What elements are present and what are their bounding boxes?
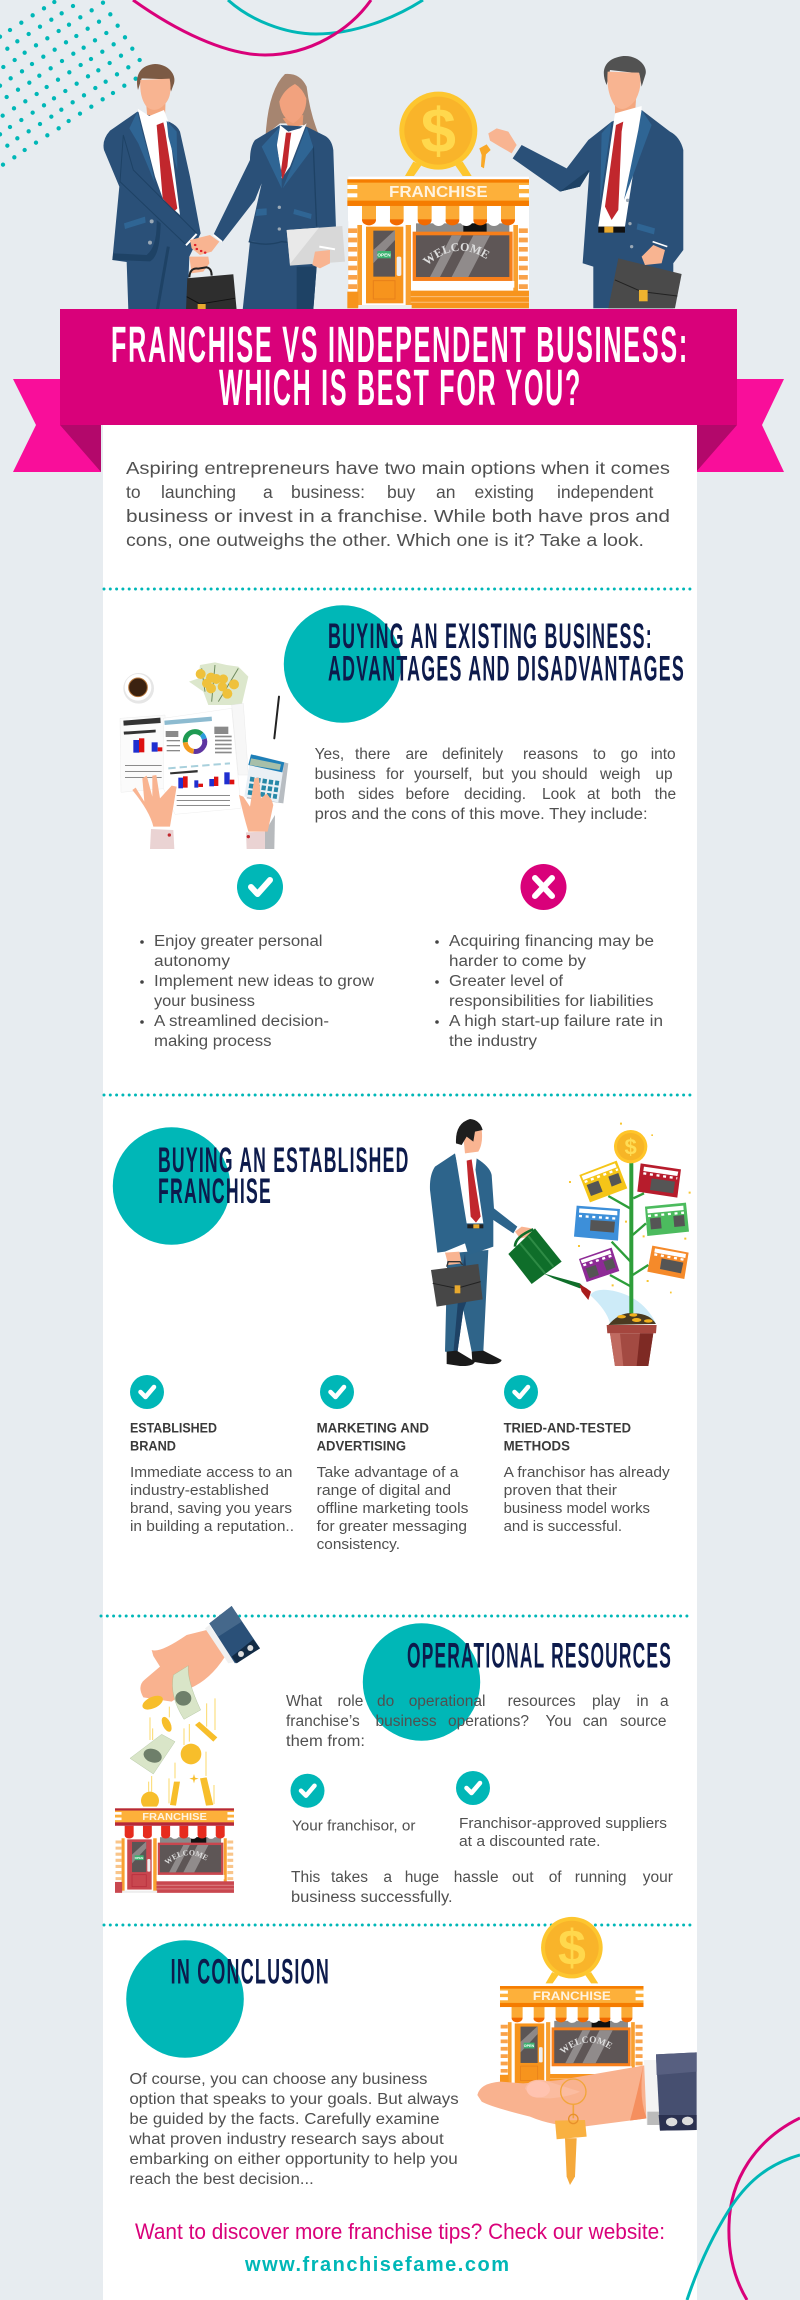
- teal circle: [363, 1623, 480, 1741]
- call to action text: www.franchisefame.com: [244, 2254, 509, 2276]
- section 4 paragraph: option that speaks to your goals. But always: [129, 2091, 459, 2108]
- feature text: range of digital and: [317, 1483, 451, 1499]
- feature: marketing and advertising: [317, 1375, 468, 1553]
- intro paragraph: [126, 458, 670, 550]
- section 3 paragraph: them from:: [286, 1733, 365, 1750]
- icon: teal check pros: [237, 864, 283, 910]
- list: pros: Enjoy greater personal: [154, 933, 322, 950]
- section 4 paragraph: [128, 2071, 459, 2188]
- feature text: in building a reputation..: [130, 1519, 294, 1535]
- section 3 paragraph: do: [377, 1693, 394, 1710]
- feature: tried and tested methods: [504, 1375, 670, 1535]
- illustration: man shaking hands with briefcase: [103, 64, 237, 310]
- section 1 paragraph: into: [651, 746, 676, 763]
- teal circle: [284, 605, 401, 723]
- feature text: brand, saving you years: [130, 1501, 292, 1517]
- section 3 heading with circle: [363, 1623, 672, 1741]
- section 4 paragraph: be guided by the facts. Carefully examine: [129, 2111, 440, 2128]
- section 1 paragraph: business: [315, 766, 376, 783]
- red franchise shop: [115, 1806, 234, 1893]
- feature text: [504, 1465, 670, 1535]
- icon: check: [456, 1771, 490, 1805]
- section 2 heading with circle: [113, 1127, 410, 1245]
- section 3 closing text: out: [512, 1869, 534, 1886]
- section 3 paragraph: You: [546, 1713, 572, 1730]
- section 3 closing text: [291, 1869, 673, 1906]
- teal circle: [126, 1940, 244, 2058]
- section 1 paragraph: for: [386, 766, 404, 783]
- illustration: woman in suit with folder: [213, 74, 345, 310]
- feature heading: TRIED-AND-TESTED: [504, 1420, 631, 1436]
- intro paragraph: launching: [161, 482, 236, 502]
- intro paragraph: a: [263, 482, 273, 502]
- illustration: hand holding shop, coin and key: [477, 1916, 697, 2185]
- list: pros: Implement new ideas to grow: [154, 973, 375, 990]
- illustration: man watering franchise money tree: [430, 1119, 691, 1366]
- title ribbon: [13, 309, 784, 472]
- section 1 paragraph: to: [593, 746, 606, 763]
- feature text: [130, 1465, 294, 1535]
- option text: at a discounted rate.: [459, 1834, 600, 1850]
- icon: check: [504, 1375, 538, 1409]
- heading text: BUYING AN ESTABLISHED: [158, 1141, 410, 1180]
- illustration: franchise shop with gold coin: WELCOME: [422, 243, 490, 264]
- section 1 paragraph: before: [406, 786, 449, 803]
- decorative curves bottom right: [687, 2118, 800, 2300]
- illustration: man holding out key with briefcase: [479, 56, 683, 308]
- section 3 paragraph: can: [583, 1713, 608, 1730]
- intro paragraph: independent: [557, 482, 653, 502]
- section 3 paragraph: franchise’s: [286, 1713, 360, 1730]
- section 3 paragraph: [286, 1693, 669, 1750]
- hand and sleeve: [140, 1606, 260, 1702]
- red franchise shop: WELCOME: [164, 1850, 208, 1864]
- feature heading: ADVERTISING: [317, 1438, 406, 1454]
- section 3 paragraph: operations?: [448, 1713, 529, 1730]
- icon: check: [320, 1375, 354, 1409]
- flower pot: [607, 1313, 657, 1366]
- call to action text: [135, 2219, 665, 2276]
- dotted dividers: [101, 589, 696, 1925]
- section 1 paragraph: there: [355, 746, 390, 763]
- section 3 paragraph: resources: [508, 1693, 576, 1710]
- section 3 paragraph: business: [376, 1713, 437, 1730]
- decorative curves top: [133, 0, 423, 55]
- section 1 paragraph: both: [315, 786, 345, 803]
- section 1 paragraph: weigh: [599, 766, 640, 783]
- section 3 closing text: hassle: [454, 1869, 499, 1886]
- section 1 paragraph: are: [406, 746, 428, 763]
- red franchise shop: OPEN: [135, 1856, 143, 1860]
- falling money: [130, 1666, 217, 1810]
- list: cons: A high start-up failure rate in: [449, 1013, 663, 1030]
- section 1 paragraph: deciding.: [464, 786, 526, 803]
- section 3 closing text: business successfully.: [291, 1889, 453, 1906]
- teal circle: [113, 1127, 230, 1245]
- source option: approved suppliers: [456, 1771, 667, 1850]
- heading text: [158, 1141, 410, 1211]
- feature heading: BRAND: [130, 1438, 176, 1454]
- section 3 paragraph: operational: [409, 1693, 485, 1710]
- list: cons: the industry: [449, 1033, 537, 1050]
- section 3 paragraph: in: [636, 1693, 649, 1710]
- section 4 paragraph: what proven industry research says about: [128, 2131, 444, 2148]
- icon: check: [290, 1774, 324, 1808]
- list: cons: Greater level of: [449, 973, 564, 990]
- feature heading: [130, 1420, 217, 1454]
- intro paragraph: business:: [291, 482, 365, 502]
- intro paragraph: buy: [387, 482, 415, 502]
- feature text: for greater messaging: [317, 1519, 467, 1535]
- feature text: Take advantage of a: [317, 1465, 460, 1481]
- section 1 paragraph: [315, 746, 676, 823]
- section 1 paragraph: you: [512, 766, 536, 783]
- option text: Your franchisor, or: [292, 1819, 416, 1835]
- list: pros: A streamlined decision-: [154, 1013, 329, 1030]
- intro paragraph: existing: [474, 482, 534, 502]
- illustration: franchise shop with gold coin: FRANCHISE: [389, 184, 488, 201]
- section 3 closing text: a: [383, 1869, 392, 1886]
- section 1 paragraph: definitely: [442, 746, 503, 763]
- section 1 paragraph: up: [655, 766, 673, 783]
- heading text: FRANCHISE: [158, 1172, 272, 1211]
- section 1 paragraph: Look: [542, 786, 576, 803]
- watering can: [508, 1228, 656, 1323]
- section 3 closing text: of: [549, 1869, 562, 1886]
- section 3 paragraph: role: [338, 1693, 363, 1710]
- feature text: offline marketing tools: [317, 1501, 468, 1517]
- section 1 paragraph: pros and the cons of this move. They include:: [315, 806, 648, 823]
- list: cons: harder to come by: [449, 953, 586, 970]
- ribbon tails: [13, 379, 784, 472]
- money plant: $: [625, 1135, 637, 1160]
- section 3 closing text: This: [291, 1869, 321, 1886]
- section 1 paragraph: go: [621, 746, 638, 763]
- section 3 closing text: huge: [405, 1869, 439, 1886]
- feature text: proven that their: [504, 1483, 617, 1499]
- intro paragraph: to: [126, 482, 141, 502]
- section 4 paragraph: Of course, you can choose any business: [129, 2071, 428, 2088]
- intro paragraph: an: [436, 482, 455, 502]
- feature heading: MARKETING AND: [317, 1420, 429, 1436]
- feature heading: [504, 1420, 631, 1454]
- list: cons: Acquiring financing may be: [449, 933, 654, 950]
- icon: pink cross cons: [520, 864, 566, 910]
- icon: check: [130, 1375, 164, 1409]
- section 1 paragraph: yourself,: [414, 766, 473, 783]
- ribbon banner: [60, 309, 737, 425]
- feature text: business model works: [504, 1501, 650, 1517]
- feature: established brand: [130, 1375, 294, 1535]
- heading text: IN CONCLUSION: [171, 1952, 330, 1992]
- feature text: A franchisor has already: [504, 1465, 670, 1481]
- section 4 heading with circle: [126, 1940, 330, 2058]
- section 1 paragraph: sides: [358, 786, 394, 803]
- list: cons: responsibilities for liabilities: [449, 993, 654, 1010]
- section 1 paragraph: should: [542, 766, 588, 783]
- section 1 paragraph: reasons: [523, 746, 578, 763]
- list: pros: making process: [154, 1033, 272, 1050]
- section 3 paragraph: What: [286, 1693, 323, 1710]
- section 1 paragraph: at: [587, 786, 601, 803]
- list: pros: [140, 933, 375, 1050]
- shop with coin: $: [558, 1920, 586, 1976]
- list: pros: autonomy: [154, 953, 230, 970]
- section 3 closing text: running: [575, 1869, 627, 1886]
- intro paragraph: business or invest in a franchise. While both have pros and: [126, 506, 670, 526]
- illustration: franchise shop with gold coin: [347, 92, 529, 308]
- illustration: franchise shop with gold coin: $: [421, 97, 456, 167]
- source option: your franchisor: [290, 1774, 416, 1835]
- feature text: Immediate access to an: [130, 1465, 292, 1481]
- list: cons: [435, 933, 663, 1050]
- section 3 closing text: your: [643, 1869, 673, 1886]
- red franchise shop: FRANCHISE: [142, 1812, 207, 1823]
- heading text: [328, 617, 685, 688]
- section 3 closing text: takes: [331, 1869, 368, 1886]
- feature heading: [317, 1420, 429, 1454]
- feature text: industry-established: [130, 1483, 269, 1499]
- section 3 paragraph: a: [660, 1693, 669, 1710]
- man: [430, 1119, 532, 1366]
- decorative dot pattern top left: [0, 2, 140, 165]
- illustration: desk with reports, hands, calculator: [120, 662, 288, 849]
- feature text: consistency.: [317, 1537, 400, 1553]
- feature text: and is successful.: [504, 1519, 622, 1535]
- intro paragraph: cons, one outweighs the other. Which one is it? Take a look.: [126, 530, 644, 550]
- section 1 heading with circle: [284, 605, 685, 723]
- intro paragraph: Aspiring entrepreneurs have two main options when it comes: [126, 458, 670, 478]
- shop with coin: OPEN: [524, 2044, 535, 2048]
- feature text: [317, 1465, 468, 1553]
- section 4 paragraph: embarking on either opportunity to help you: [129, 2151, 458, 2168]
- section 4 paragraph: reach the best decision...: [129, 2171, 314, 2188]
- title text: [111, 316, 689, 416]
- shop with coin: WELCOME: [559, 2036, 612, 2053]
- section 3 paragraph: source: [620, 1713, 667, 1730]
- list: pros: your business: [154, 993, 255, 1010]
- hand, sleeve and key: [477, 2052, 697, 2185]
- shop with coin: FRANCHISE: [533, 1989, 611, 2003]
- illustration: hand dropping money onto red shop: [115, 1606, 260, 1893]
- section 1 paragraph: both: [611, 786, 641, 803]
- ribbon folds: [60, 425, 737, 472]
- feature heading: METHODS: [504, 1438, 570, 1454]
- section 3 paragraph: play: [592, 1693, 621, 1710]
- money plant: [569, 1123, 691, 1313]
- section 1 paragraph: but: [482, 766, 504, 783]
- shop with coin: [500, 1916, 644, 2084]
- white content panel: [103, 425, 697, 2300]
- option text: Franchisor-approved suppliers: [459, 1816, 667, 1832]
- option text: [459, 1816, 667, 1850]
- section 1 paragraph: the: [655, 786, 676, 803]
- illustration: franchise shop with gold coin: OPEN: [377, 252, 391, 257]
- section 1 paragraph: Yes,: [315, 746, 344, 763]
- feature heading: ESTABLISHED: [130, 1420, 217, 1436]
- call to action text: Want to discover more franchise tips? Check our website:: [135, 2219, 665, 2244]
